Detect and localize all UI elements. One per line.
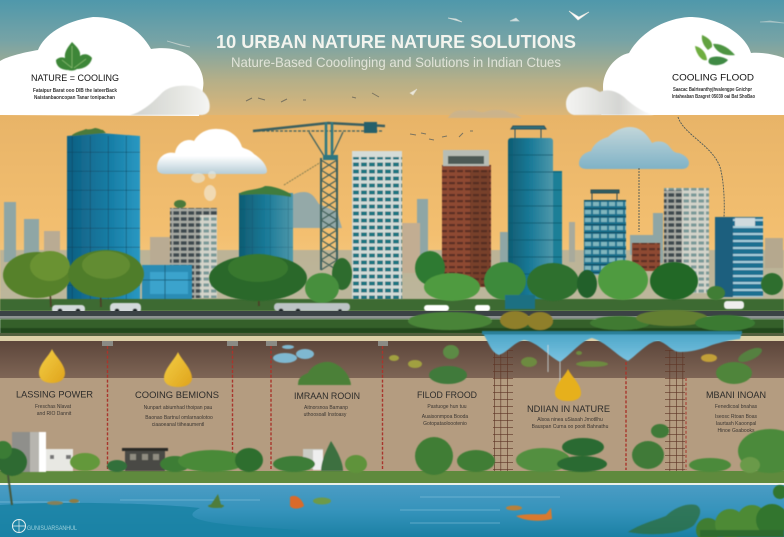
logo and credit: GUNISUARSANHUL (27, 526, 78, 532)
icon: green leaves (695, 35, 735, 65)
building: brown brick tower (442, 150, 491, 287)
trees (516, 424, 669, 472)
cloud: central white with rain (157, 129, 267, 201)
description (144, 405, 213, 428)
birds (167, 11, 784, 140)
heading: FILOD FROOD (417, 390, 477, 401)
sky background (0, 0, 784, 315)
description text: Saacac Balrteanthyjhvalengpe Gnichpr (673, 87, 752, 93)
cloud: small grey behind crane (280, 192, 342, 228)
trees (415, 437, 495, 475)
city buildings (12, 432, 73, 472)
description: Iseosc Rtoan Boas (715, 414, 757, 420)
description: and RIO Dannit (37, 411, 72, 417)
description text: Naistanbaoncopan Tanar tonipachan (34, 95, 115, 101)
icon: green shrub (429, 366, 467, 384)
heading: IMRAAN ROOIN (294, 391, 360, 402)
title: 10 URBAN NATURE NATURE SOLUTIONS (216, 32, 576, 52)
description: Hinoe Gsabooks (718, 428, 755, 434)
dashed cables from clouds (639, 117, 724, 232)
river (0, 483, 784, 537)
underground soil (0, 341, 784, 472)
hedge (0, 310, 784, 334)
description (35, 404, 72, 417)
heading: cooling flood: COOLING FLOOD (672, 72, 754, 84)
road (0, 311, 784, 319)
section: indian urban (689, 345, 784, 473)
building: blue balconied tower (584, 190, 626, 275)
grass strip (0, 471, 784, 483)
description: ciaaoeanal tiiheaumentl (152, 422, 204, 428)
description: uthoosoall Instoasy (304, 412, 347, 418)
building: teal glass with roof garden (239, 186, 293, 275)
icon: yellow drop (39, 349, 65, 383)
section: cooling solutions (107, 352, 263, 472)
icon: green shrub (716, 362, 752, 384)
section: urban region (273, 345, 367, 473)
section: flood (389, 345, 495, 475)
floating leaves (389, 345, 459, 368)
trees: right (484, 260, 783, 301)
building: grey office (170, 200, 217, 298)
distant skyline (0, 199, 784, 312)
building: blue striped office (715, 217, 763, 297)
floating leaves (521, 351, 608, 367)
icon: green shrub (298, 362, 351, 385)
subtitle: Nature-Based Cooolinging and Solutions in Indian Ctues (231, 54, 561, 70)
icon: yellow drop (555, 369, 581, 401)
shrub (70, 453, 100, 471)
description text (33, 88, 117, 101)
buildings and shrubs (273, 441, 367, 473)
river leaves and koi (47, 494, 552, 521)
heading: LASSING POWER (16, 390, 93, 400)
heading: nature cooling: NATURE = COOLING (31, 73, 119, 84)
panel: left info cloud (0, 17, 210, 116)
cloud puff shadow (130, 86, 210, 115)
description: Aitnorsnoa Bamanp (304, 405, 348, 411)
house (122, 448, 168, 471)
section: lasting power (12, 349, 100, 472)
logo and credit (12, 520, 78, 532)
icon: blue clouds (273, 345, 314, 363)
description: Auaisonmpoa Booda (422, 414, 468, 420)
heading: NDIIAN IN NATURE (527, 404, 610, 415)
cars on the road (52, 301, 744, 314)
building: tall blue glass (67, 128, 140, 307)
section: indian in nature (516, 351, 669, 472)
pillar caps (102, 341, 388, 346)
building: low teal block (142, 265, 192, 307)
description text: Intaheaban Bzagret 05039 oai Bat ShoBao (672, 94, 755, 100)
hedges (107, 448, 263, 472)
description (304, 405, 348, 418)
panel: right info cloud (566, 17, 784, 115)
description (715, 404, 758, 434)
pavement beam (0, 333, 784, 341)
building: grey and white office (664, 188, 709, 293)
tower base (505, 295, 535, 309)
storage lattice columns (493, 350, 685, 472)
description: Alsoa ninea uSiasah Jmotllhu (537, 417, 603, 423)
description: Iaurtash Kaoonpal (716, 421, 756, 427)
pillars: red dashed (108, 346, 686, 470)
cloud puff shadow (566, 87, 654, 115)
description: Freschas Nlavat (35, 404, 72, 410)
building: white and teal tower (352, 151, 402, 306)
shrubs (689, 429, 784, 473)
description text: Fataipur Barat ooo DIB the lateerBack (33, 88, 117, 94)
description: Gotopataoloootenio (423, 421, 467, 427)
description: Baonao Bartnul omlarnaolotoo (145, 415, 213, 421)
foreground tree: right (628, 485, 784, 537)
trees: left pair (3, 250, 144, 298)
heading: COOING BEMIONS (135, 390, 219, 401)
description: Bauspan Curna oo pooit Bahnathu (532, 424, 609, 430)
trees: centre (209, 251, 480, 303)
foreground tree: left (0, 441, 27, 505)
cloud: blue right (579, 127, 689, 169)
icon: ivy leaf (56, 42, 92, 71)
description (422, 404, 468, 427)
description (532, 417, 609, 430)
rain water pool (482, 331, 742, 384)
heading: MBANI INOAN (706, 390, 766, 401)
description: Nunpart abiumhad thoipan pau (144, 405, 213, 411)
description text (672, 87, 755, 100)
building: small brick block (632, 243, 660, 271)
tree line (3, 250, 783, 309)
building: teal curved tower (508, 126, 562, 308)
icon: yellow drop (164, 352, 192, 387)
description: Pastuoge hun tuu (427, 404, 467, 410)
tower crane (253, 122, 385, 270)
floating leaves (701, 345, 764, 365)
ground planting behind the road (0, 299, 784, 311)
description: Fenedicoal bnahas (715, 404, 758, 410)
faint clouds on the horizon (448, 110, 522, 118)
